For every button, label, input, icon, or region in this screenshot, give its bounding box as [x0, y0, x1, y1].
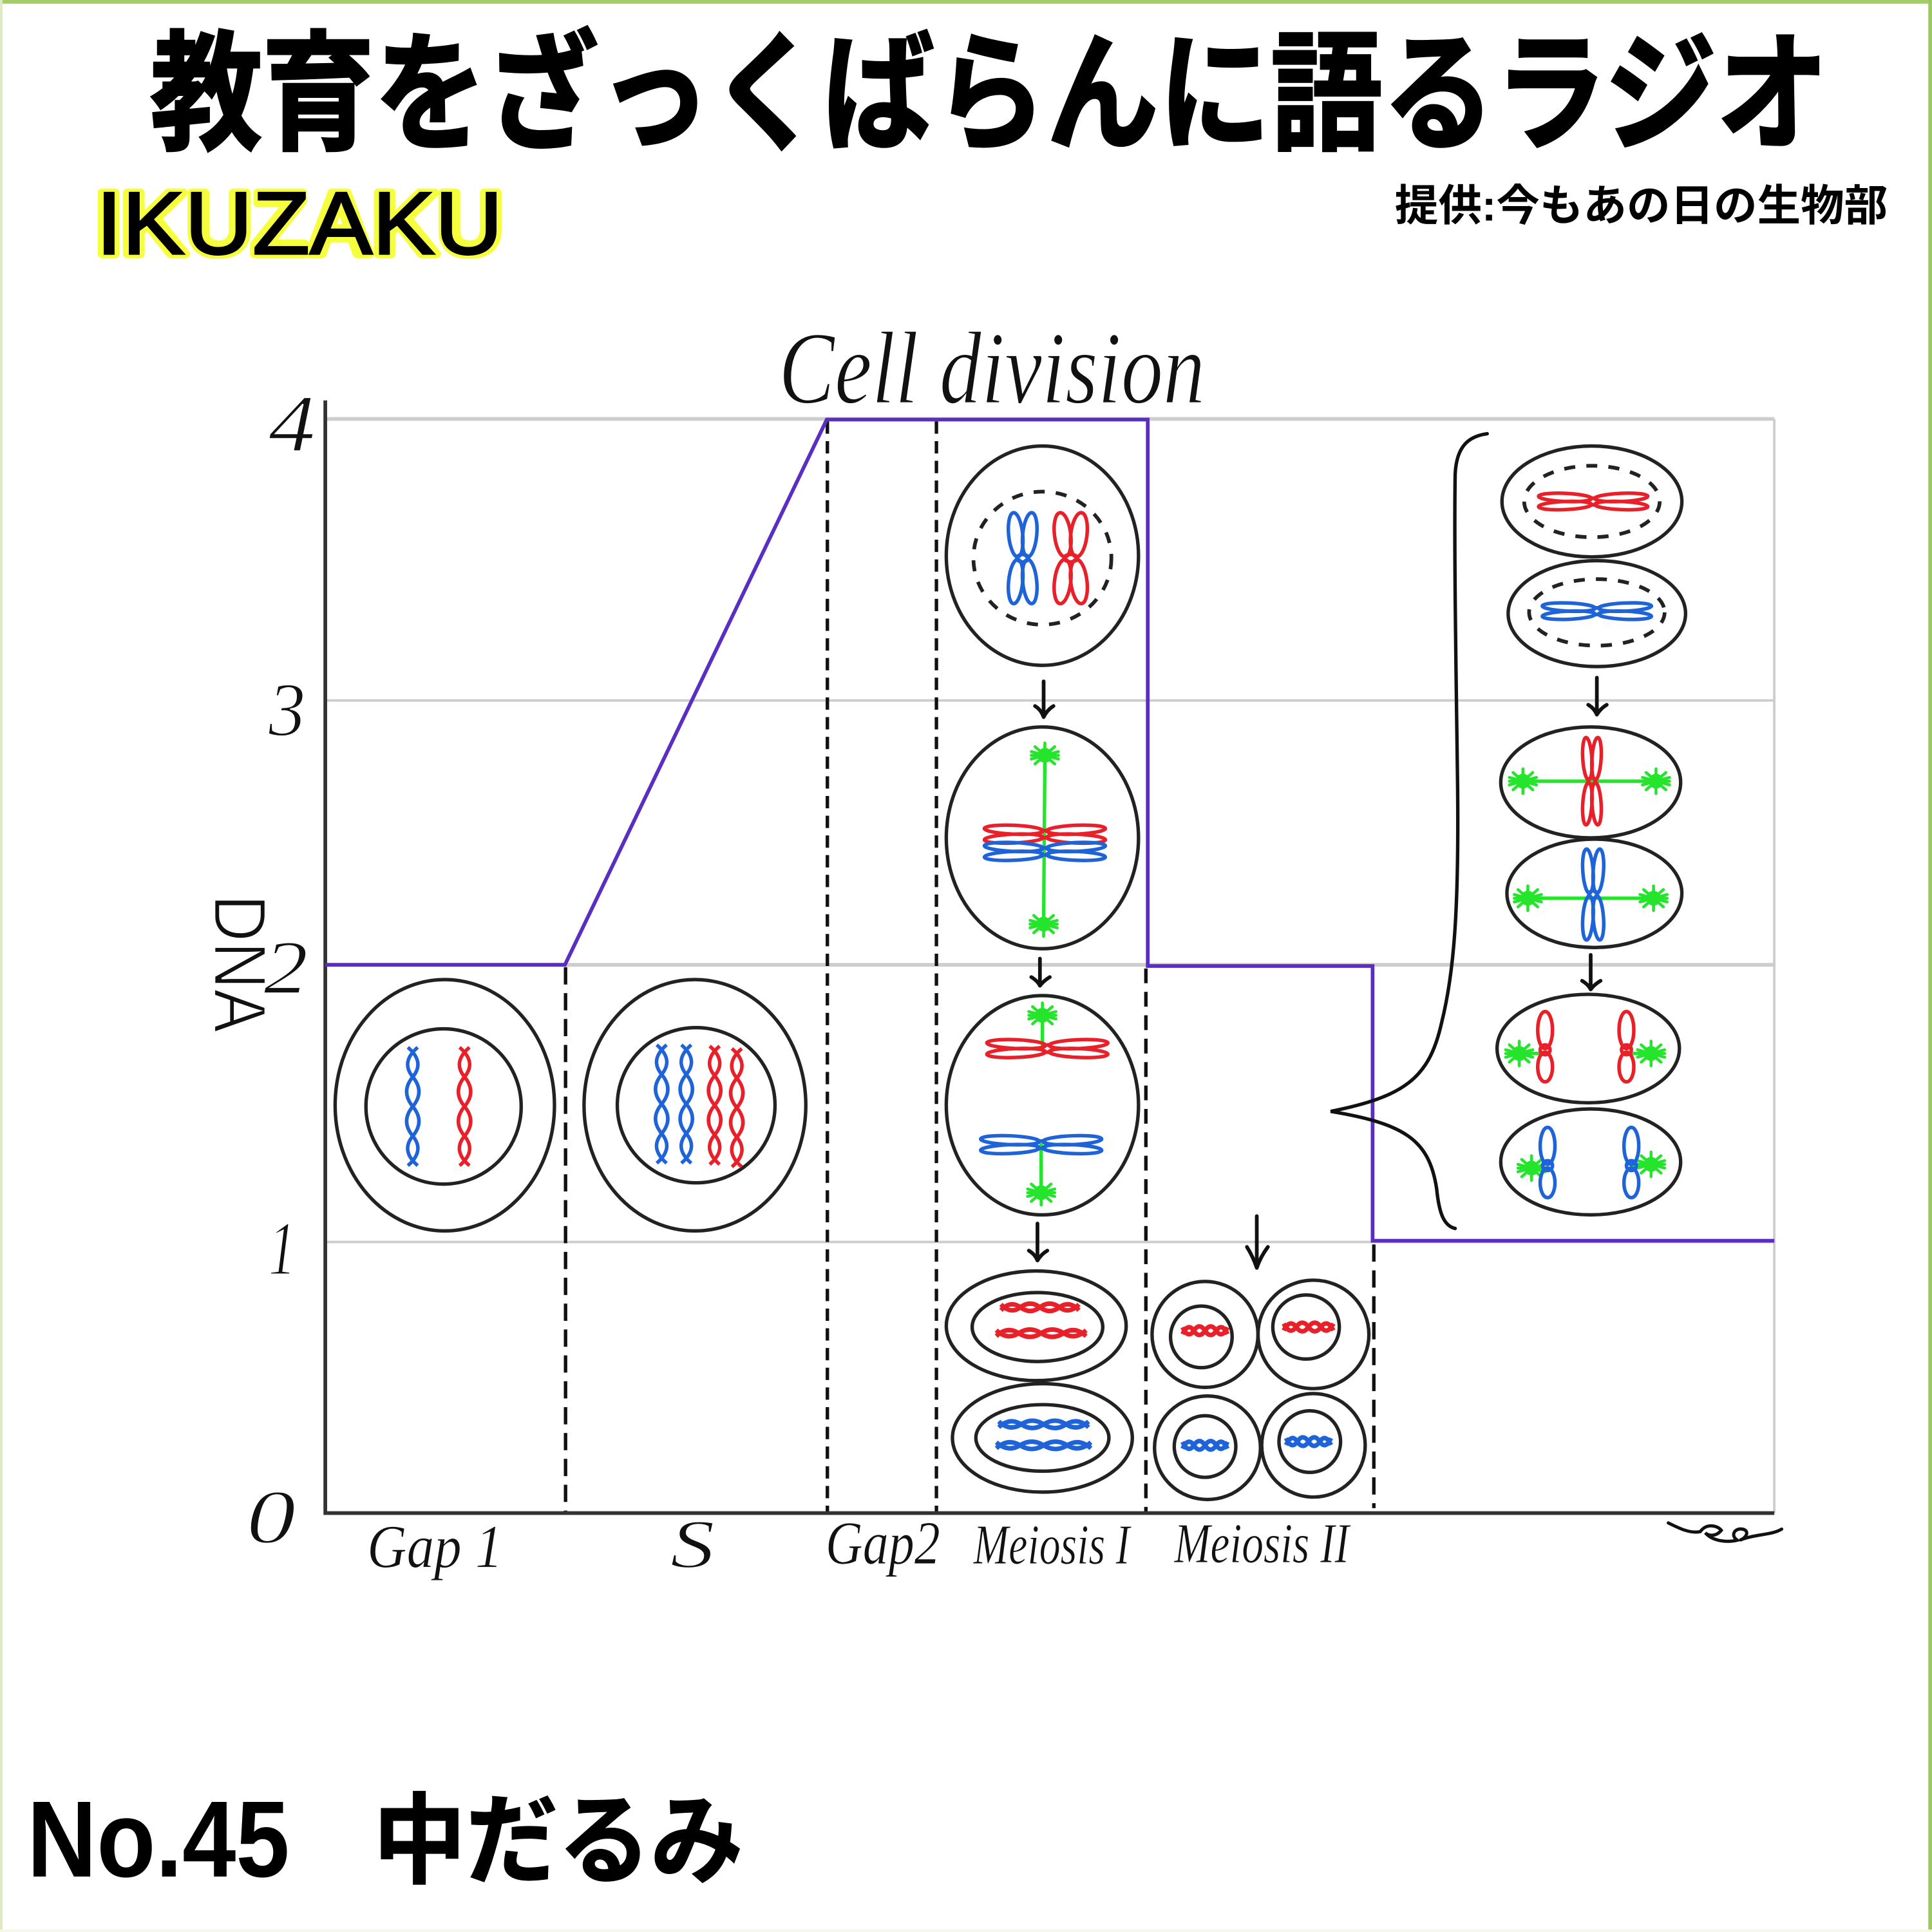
- y axis tick labels: [247, 379, 316, 1559]
- time axis squiggle: [1669, 1523, 1782, 1541]
- cell: telophase I red: [946, 1271, 1126, 1381]
- cell: anaphase II blue: [1501, 1109, 1681, 1215]
- x axis labels: Gap 1: [367, 1513, 503, 1581]
- brace pointing at meiosis II: [1331, 433, 1487, 1229]
- arrow: [1029, 1224, 1047, 1260]
- x axis labels: [367, 1507, 1351, 1583]
- cell: anaphase I: [946, 996, 1139, 1215]
- y axis tick labels: 3: [268, 667, 305, 752]
- cell: metaphase II blue: [1507, 839, 1682, 947]
- x axis labels: S: [670, 1507, 715, 1583]
- y axis title: DNA: [198, 895, 281, 1033]
- arrow: [1031, 959, 1050, 986]
- arrow: [1247, 1216, 1268, 1268]
- arrow: [1035, 681, 1054, 717]
- x axis labels: Gap2: [826, 1509, 940, 1577]
- grid lines: [325, 419, 1774, 1513]
- x axis labels: Meiosis I: [972, 1514, 1132, 1577]
- chart: DNA content over the cell cycle: [325, 401, 1774, 1513]
- cell: meiosis II red 1: [1152, 1282, 1258, 1387]
- cell: metaphase I: [946, 727, 1139, 949]
- phase boundary dashed lines: [565, 421, 1374, 1513]
- cell: prophase II blue: [1508, 561, 1685, 667]
- cell: S phase: [584, 980, 806, 1231]
- y axis tick labels: 4: [269, 379, 316, 469]
- arrow: [1588, 677, 1607, 715]
- cell: meiosis II blue 2: [1262, 1394, 1365, 1497]
- cell: meiosis II blue 1: [1155, 1396, 1260, 1499]
- y axis tick labels: 1: [269, 1206, 296, 1291]
- axes: [325, 401, 1774, 1513]
- cell: Gap 1: [335, 980, 554, 1231]
- episode title: 中だるみ: [374, 1786, 743, 1897]
- credit: 提供:今もあの日の生物部: [1395, 182, 1888, 230]
- cell: prophase II red: [1502, 446, 1682, 557]
- DNA amount line: [325, 419, 1774, 1241]
- y axis tick labels: 0: [247, 1474, 296, 1559]
- cell: meiosis II red 2: [1258, 1280, 1369, 1388]
- IKUZAKU logo text: IKUZAKU: [96, 174, 503, 273]
- cell: metaphase II red: [1501, 727, 1681, 838]
- cell: anaphase II red: [1497, 994, 1680, 1103]
- arrow: [1582, 955, 1600, 989]
- cell: telophase I blue: [952, 1384, 1132, 1492]
- IKUZAKU logo text: IKUZAKU: [96, 174, 503, 273]
- episode number: No.45: [27, 1779, 290, 1900]
- x axis labels: Meiosis II: [1173, 1513, 1351, 1575]
- y axis tick labels: 2: [263, 925, 308, 1010]
- chart heading: Cell division: [779, 311, 1205, 426]
- cell: prophase I: [946, 446, 1139, 665]
